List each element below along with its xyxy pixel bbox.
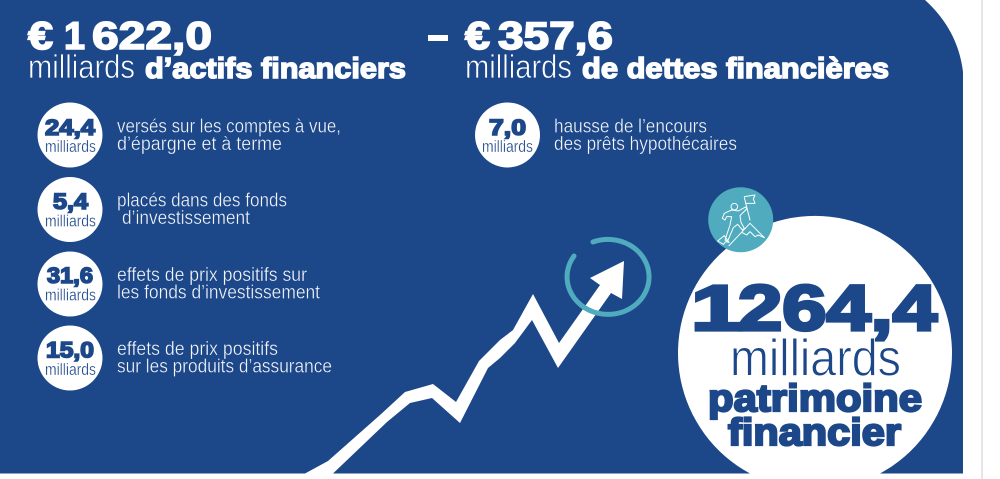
big white circle: total financial wealth: patrimoine (708, 378, 922, 420)
item: 24,4 milliards: d’épargne et à terme (117, 134, 282, 155)
item: 24,4 milliards: milliards (45, 138, 96, 156)
item: 31,6 milliards: milliards (45, 286, 96, 304)
heading: financial assets: d’actifs financiers (145, 53, 406, 85)
item: 31,6 milliards: 31,6 (47, 263, 93, 288)
big white circle: total financial wealth (678, 216, 952, 474)
item: 31,6 milliards: effets de prix positifs sur (117, 265, 308, 286)
item: 24,4 milliards: versés sur les comptes à vue, (117, 116, 341, 138)
item: 5,4 milliards: d’investissement (122, 208, 251, 229)
big white circle: total financial wealth: 264,4 (738, 272, 938, 344)
heading: financial debts: de dettes financières (582, 53, 889, 85)
heading: financial assets: milliards (28, 48, 135, 85)
item: 5,4 milliards: milliards (45, 212, 96, 230)
heading: financial debts: 357,6 (498, 15, 613, 58)
heading: financial debts: milliards (465, 48, 572, 85)
item: 7,0 milliards: milliards (482, 138, 533, 156)
big white circle: total financial wealth: milliards (730, 330, 901, 388)
icon: climber with flag on mountain (708, 187, 773, 252)
heading: financial assets (28, 15, 406, 85)
item: 15,0 milliards: effets de prix positifs (117, 339, 278, 360)
item: 24,4 milliards: 24,4 (45, 115, 96, 140)
item: 15,0 milliards: sur les produits d’assurance (117, 356, 332, 378)
item: 24,4 milliards (38, 102, 341, 168)
big white circle: total financial wealth: financier (728, 412, 901, 454)
item: 31,6 milliards: les fonds d’investissement (117, 282, 321, 304)
item: 5,4 milliards: 5,4 (53, 189, 89, 214)
heading: financial assets: 622,0 (92, 15, 212, 58)
rising arrow chart (305, 239, 649, 474)
item: 15,0 milliards (38, 326, 332, 390)
item: 5,4 milliards (38, 177, 287, 242)
heading: financial debts: € (465, 15, 490, 58)
item: 15,0 milliards: milliards (45, 361, 96, 379)
item: 15,0 milliards: 15,0 (46, 338, 94, 362)
item: 31,6 milliards (38, 252, 321, 316)
item: 7,0 milliards: hausse de l’encours (554, 116, 707, 138)
item: 7,0 milliards: 7,0 (489, 115, 526, 140)
item: 7,0 milliards (475, 102, 737, 168)
big white circle: total financial wealth: 1 (691, 272, 743, 344)
heading: financial assets: € (28, 15, 53, 58)
item: 5,4 milliards: placés dans des fonds (117, 190, 287, 212)
heading: financial assets: 1 (64, 15, 85, 58)
heading: financial debts (428, 15, 889, 85)
teal brush ring (567, 239, 649, 314)
item: 7,0 milliards: des prêts hypothécaires (554, 134, 737, 155)
